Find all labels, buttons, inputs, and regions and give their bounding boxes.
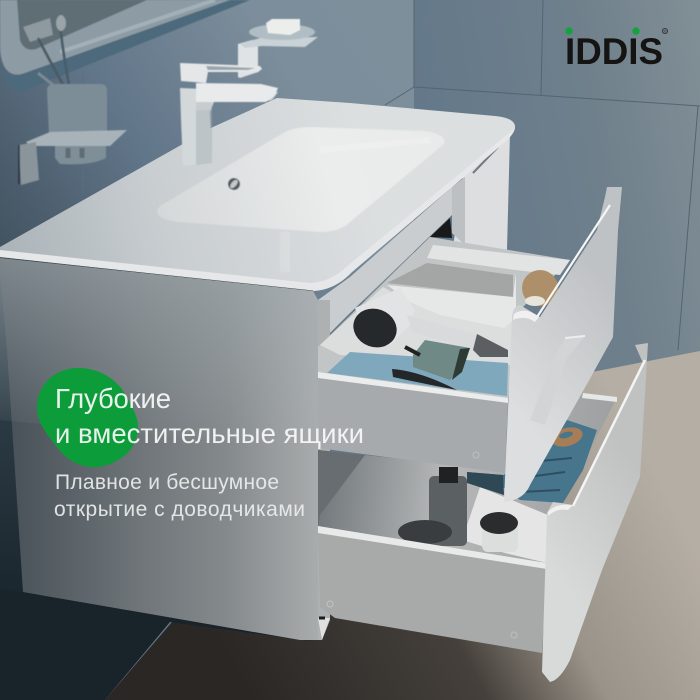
hair dryer [348, 288, 508, 357]
bottom drawer interior [318, 393, 617, 567]
razor [392, 369, 457, 390]
headline: и вместительные ящики [55, 418, 364, 449]
organizer box [387, 263, 516, 328]
subtitle: открытие с доводчиками [54, 498, 305, 521]
basin [157, 127, 445, 272]
glass bottle [405, 340, 470, 380]
mirror [0, 0, 250, 93]
towel top drawer [327, 352, 508, 396]
rear cabinet section [430, 133, 510, 250]
headline: Глубокие [55, 383, 171, 414]
logo: IDDIS: ® [663, 28, 667, 34]
counter top [0, 98, 515, 291]
subtitle: Плавное и бесшумное [55, 471, 279, 494]
sponge [522, 270, 558, 306]
logo: IDDIS: IDDIS [565, 31, 663, 72]
faucet [180, 63, 278, 166]
green blob [37, 368, 138, 467]
subtitle [54, 471, 305, 521]
bottom drawer front [542, 343, 648, 682]
top drawer side panel [318, 372, 508, 473]
toothbrush holder [19, 15, 127, 185]
cabinet body [0, 258, 330, 640]
top drawer front [504, 187, 622, 502]
soap dish [238, 19, 318, 78]
bottom drawer side panel [318, 526, 547, 653]
headline [55, 383, 364, 449]
top drawer interior [318, 237, 570, 400]
cabinet underside strip [318, 187, 452, 345]
bottom drawer contents [398, 420, 597, 563]
shadow under cabinet [0, 590, 317, 700]
floor [105, 351, 700, 700]
